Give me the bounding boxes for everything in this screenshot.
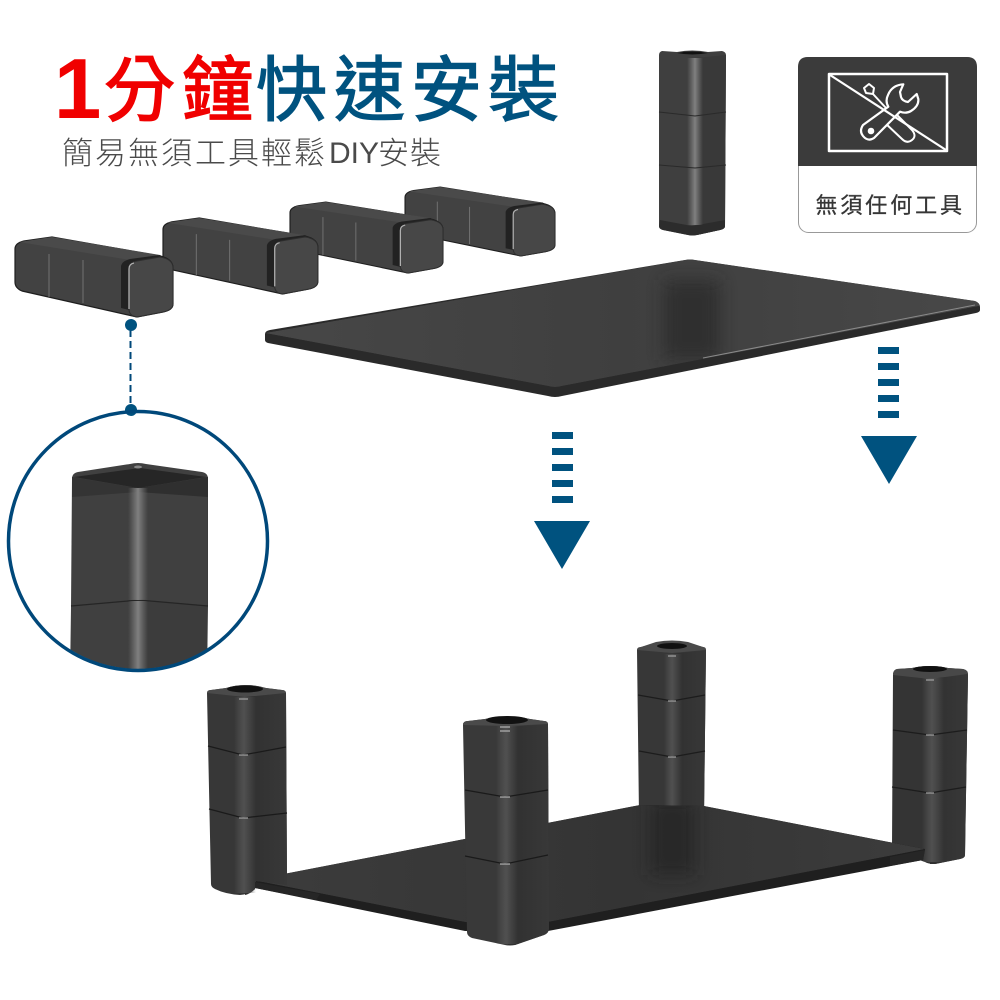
callout leader line xyxy=(125,319,137,416)
horizontal leg 3 xyxy=(290,202,443,273)
horizontal leg 1 xyxy=(15,237,173,317)
vertical leg xyxy=(659,50,726,236)
assembled stand xyxy=(207,640,968,946)
floating top plate xyxy=(265,260,980,397)
subtitle: 簡易無須工具輕鬆 xyxy=(62,136,325,171)
subtitle xyxy=(62,136,441,171)
pillar close-up xyxy=(70,463,208,681)
icon: tools crossed out xyxy=(829,74,947,151)
near pillar xyxy=(463,716,549,946)
detail circle: pillar close-up xyxy=(8,412,268,681)
subtitle: 安裝 xyxy=(378,136,441,171)
back pillar xyxy=(637,640,706,816)
badge: no tools needed xyxy=(798,57,977,232)
left shelf edge xyxy=(255,882,320,900)
right pillar xyxy=(892,666,968,864)
title xyxy=(54,42,559,137)
title: blue part: 快速安裝 xyxy=(256,52,559,131)
subtitle: DIY xyxy=(329,137,379,170)
arrow: left down xyxy=(534,432,590,569)
badge dark header xyxy=(798,57,977,166)
title: red part: 1 xyxy=(54,42,101,137)
circle outline xyxy=(8,412,268,670)
left pillar xyxy=(207,685,287,895)
right shelf edge xyxy=(890,850,925,866)
badge panel xyxy=(798,58,976,232)
title: red part xyxy=(54,42,253,137)
horizontal leg 4 xyxy=(405,187,555,256)
shelf xyxy=(253,800,925,931)
badge label: 無須任何工具 xyxy=(816,193,965,218)
horizontal leg 2 xyxy=(163,218,318,294)
arrow: right down xyxy=(861,347,917,484)
title: red part: 分鐘 xyxy=(104,52,253,131)
